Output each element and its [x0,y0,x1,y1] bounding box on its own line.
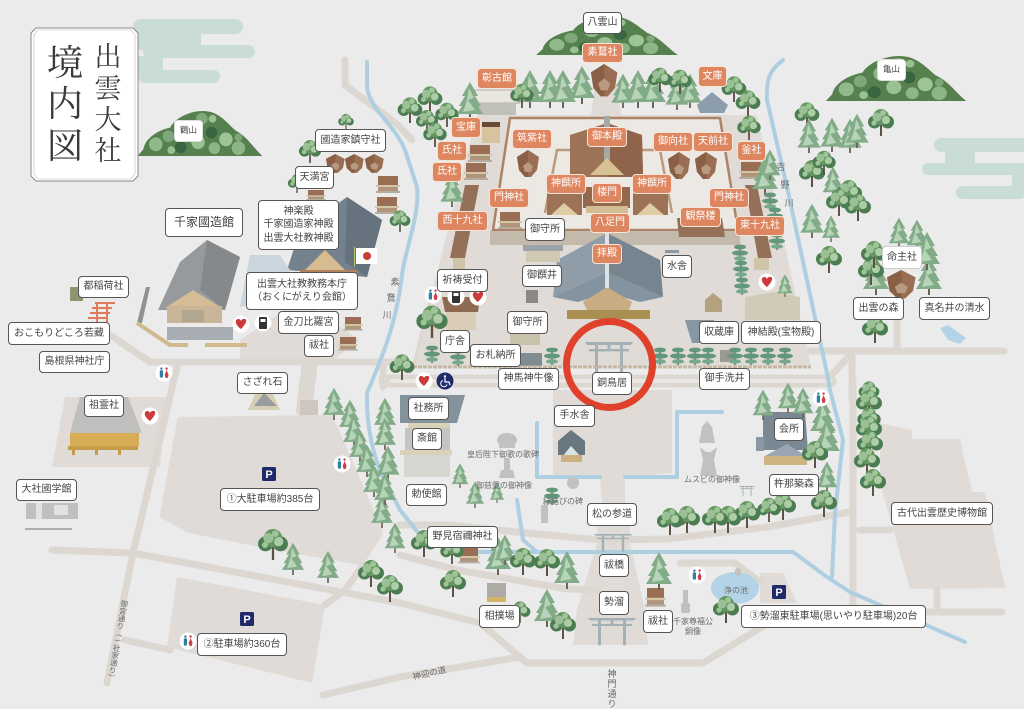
label: 相撲場 [479,605,520,628]
label: 御守所 south: 御守所 [512,317,542,328]
label: 千家國造館 [165,208,243,237]
label: 出雲の森: 出雲の森 [858,303,898,314]
shrines [306,64,916,607]
label: 大駐車場 [220,488,320,511]
shrine label: 楼門 [592,183,622,203]
trees: south and west [258,306,793,639]
west compound [70,197,382,345]
label: 亀山: 亀山 [883,64,900,74]
facility icons: terminals [254,288,464,332]
label: 千家國造館: 千家國造館 [174,215,234,229]
map notes: 素 [390,276,400,287]
label: 祓橋: 祓橋 [604,560,624,571]
label: さざれ石: さざれ石 [242,377,282,388]
red highlight circle [566,322,652,408]
mountains [138,16,966,156]
label: 御手洗井 [699,368,750,390]
label: 会所: 会所 [779,424,799,435]
label: 古代出雲歴史博物館: 古代出雲歴史博物館 [897,508,987,519]
label: 大社國学館 [16,479,77,501]
map notes: 神迎の道 [412,664,447,682]
map notes: 吉 [776,162,786,172]
title panel: 大 [94,105,122,135]
shrine label: 東十九社: 東十九社 [740,220,780,231]
map notes: 鵞 [386,293,396,303]
label: 銅鳥居: 銅鳥居 [597,378,627,389]
label: 祓社 south [643,610,673,633]
map notes: 川 [382,310,392,320]
label: 祖霊社: 祖霊社 [89,400,119,411]
label: 勢溜 [599,591,629,615]
map notes: 千家尊福公 [673,616,713,626]
main precinct walls [490,118,740,245]
shrine label: 門神社 east: 門神社 [714,192,744,203]
label: 命主社 [882,246,922,269]
label: 銅鳥居 [592,372,632,395]
pond: 真名井 spring [940,325,966,344]
label: 島根県神社庁: 島根県神社庁 [44,356,104,367]
facility icon: wheelchair [436,372,454,390]
label: 手水舎 [554,405,595,427]
map notes: ムスビの御神像 [684,474,740,484]
shrine label: 拝殿 [592,244,622,264]
label: 神結殿 [741,321,821,344]
map notes: 野 [780,180,790,190]
label: 祓社: 祓社 [309,340,329,351]
label: 杵那築森 [769,474,819,496]
label: 社務所: 社務所 [414,403,444,414]
shrine label: 拝殿: 拝殿 [597,248,617,259]
shrine label: 八足門: 八足門 [595,217,625,228]
label: 八雲山 [583,12,622,34]
label: お札納所 [470,344,521,367]
label: 祈祷受付: 祈祷受付 [442,275,482,286]
trees: southeast [646,381,886,623]
shrine label: 観祭楼: 観祭楼 [686,211,716,222]
label: 勅使館: 勅使館 [412,489,442,500]
shrine label: 宝庫: 宝庫 [456,122,476,133]
label: 大駐車場: ①大駐車場約385台 [227,494,313,505]
rivers and channels [367,60,965,642]
label: 天満宮 [295,166,334,189]
shrine label: 御向社 [653,132,693,152]
label: 真名井の清水: 真名井の清水 [924,303,984,314]
map notes: 皇后陛下御歌の歌碑 [467,449,539,459]
shrine label: 御向社: 御向社 [658,136,688,147]
shrine label: 筑紫社 [512,129,552,149]
label: 勢溜: 勢溜 [604,597,624,608]
map notes: り [607,699,617,709]
title panel: 境 [47,43,83,83]
shrine label: 素鵞社: 素鵞社 [588,47,618,58]
label: 出雲大社教教務本庁: 出雲大社教教務本庁 [257,278,347,290]
label: 金刀比羅宮: 金刀比羅宮 [284,317,334,328]
label: 収蔵庫: 収蔵庫 [704,327,734,338]
shrine label: 氏社 south: 氏社 [437,166,457,177]
label: 真名井の清水 [919,297,990,320]
label: 神楽殿 [258,200,339,250]
label: 八雲山: 八雲山 [588,17,618,28]
map notes [106,162,794,709]
shrine label: 神饌所 west [546,174,586,194]
label: 会所 [774,418,804,441]
shrine label: 楼門: 楼門 [597,187,617,198]
label: 御手洗井: 御手洗井 [704,373,744,384]
map notes: 門 [607,679,617,689]
label: 出雲大社教教務本庁 [246,272,358,310]
label: お札納所: お札納所 [476,350,516,361]
shrine label: 門神社 west [489,188,529,208]
label: おこもりどころ若藏 [8,322,110,345]
shrine label: 神饌所 east [632,174,672,194]
label: 駐車場: ②駐車場約360台 [204,639,280,650]
label: 水舎 [662,255,692,278]
map notes: 神 [607,668,617,679]
label: 手水舎: 手水舎 [560,410,590,421]
label: 社務所 [408,397,449,420]
label: 御饌井: 御饌井 [527,270,557,281]
map notes: 通 [607,689,617,699]
label: 松の参道 [587,503,637,526]
label: 天満宮: 天満宮 [300,172,330,183]
map notes: 浄の池 [724,585,748,595]
label: 都稲荷社: 都稲荷社 [84,281,124,292]
label: 金刀比羅宮 [278,311,339,334]
shrine label: 観祭楼 [680,207,721,227]
title panel: 雲 [94,74,122,104]
label: 野見宿禰神社 [427,526,498,548]
label: 松の参道: 松の参道 [592,509,632,520]
label: 鶴山: 鶴山 [180,125,197,135]
shrine label: 東十九社 [735,216,785,236]
shrine label: 氏社 south [432,162,462,182]
torii gates [585,342,755,645]
shrine label: 天前社: 天前社 [698,136,728,147]
label: 島根県神社庁 [39,351,110,373]
shrine label: 御本殿 [587,127,627,147]
south buildings [400,395,808,602]
facility icons: AED [142,274,776,424]
title panel: 出 [94,42,122,72]
label: 御守所 north [525,218,565,241]
shrine label: 氏社 north: 氏社 [442,145,462,156]
label: 御守所 south [507,311,548,334]
label: 祓橋 [599,554,629,577]
label: 古代出雲歴史博物館 [891,502,993,525]
shrine label: 八足門 [590,213,630,233]
label: 勅使館 [406,484,447,506]
map notes: 縁結びの碑 [543,496,583,506]
title panel: 内 [47,84,83,124]
label: 神馬神牛像: 神馬神牛像 [504,373,554,384]
shrine label: 文庫: 文庫 [702,71,722,82]
shrine label: 御本殿: 御本殿 [592,131,622,142]
shrine label: 彰古館: 彰古館 [482,73,512,84]
祖霊社 and 大社國学館 buildings [25,392,318,530]
label: さざれ石 [237,372,288,394]
shrine label: 門神社 west: 門神社 [494,192,524,203]
trees: north row [288,66,761,232]
map notes: 御慈愛の御神像 [476,480,532,490]
trees: east [732,102,942,343]
label: 鶴山 [174,120,203,142]
label: 神楽殿: 神楽殿 [284,206,314,217]
parking signs: P [775,587,783,599]
label: 神楽殿: 千家國造家神殿 [264,219,334,230]
shrine label: 宝庫 [451,117,481,138]
shrine label: 西十九社 [437,211,488,231]
label: 都稲荷社 [78,276,129,298]
label: 勢溜東駐車場: ③勢溜東駐車場(思いやり駐車場)20台 [750,611,917,622]
shrine label: 西十九社: 西十九社 [442,215,482,226]
shrine label: 釜社: 釜社 [742,145,762,156]
label: 収蔵庫 [699,321,739,344]
parking signs [240,467,786,626]
label: 國造家鎮守社: 國造家鎮守社 [320,135,380,146]
map notes: 川 [784,198,794,208]
title panel [30,28,138,182]
label: 庁舎: 庁舎 [445,336,465,347]
shrine label: 神饌所 west: 神饌所 [551,178,581,189]
shrine label: 氏社 north [437,141,467,161]
label: 斎館: 斎館 [417,433,437,444]
grounds and parking areas [52,85,1005,683]
label: 祓社 south: 祓社 [648,616,668,627]
facility icons: restrooms [156,286,830,650]
shrine label: 釜社 [737,141,766,161]
label: 祈祷受付 [437,269,488,292]
parking signs: P [243,614,251,626]
shrine label: 天前社 [693,132,733,152]
shrine label: 神饌所 east: 神饌所 [637,178,667,189]
label: 祓社 [304,335,334,357]
label: 神結殿: 神結殿(宝物殿) [748,327,814,338]
pond [711,572,759,604]
label: 御饌井 [522,265,562,287]
clouds [133,19,1024,199]
shrine label: 素鵞社 [582,43,623,63]
label: 祖霊社 [84,395,124,417]
map notes: 御宮通り（一社家通り） [106,598,130,682]
label: 神楽殿: 出雲大社教神殿 [264,233,334,244]
shrine label: 文庫 [698,66,727,87]
label: 出雲大社教教務本庁: （おくにがえり会館） [252,292,352,303]
label: 御守所 north: 御守所 [530,224,560,235]
flag [354,247,377,267]
label: 國造家鎮守社 [315,129,386,152]
shrine label: 彰古館 [477,68,517,89]
label: 出雲の森 [853,297,904,320]
precinct buildings [413,90,811,367]
label: おこもりどころ若藏: おこもりどころ若藏 [14,328,104,339]
worship hall roof [553,233,663,319]
shrine label: 門神社 east [709,188,749,208]
title panel: 社 [94,136,122,166]
label: 命主社: 命主社 [887,252,917,263]
shrine label: 筑紫社: 筑紫社 [517,133,547,144]
main hall [547,116,668,215]
title panel: 図 [47,126,83,166]
label: 神馬神牛像 [498,368,559,390]
label: 斎館 [412,428,442,450]
label: 庁舎 [440,330,470,353]
label: 大社國学館: 大社國学館 [22,484,72,495]
map notes: 銅像 [685,626,701,636]
label: 水舎: 水舎 [667,261,687,272]
label: 亀山 [877,59,906,81]
label: 野見宿禰神社: 野見宿禰神社 [432,531,492,542]
label: 杵那築森: 杵那築森 [774,479,814,490]
parking signs: P [265,469,273,481]
label: 勢溜東駐車場 [741,605,926,628]
label: 駐車場 [197,633,287,656]
label: 相撲場: 相撲場 [484,611,514,622]
statues [497,421,741,613]
